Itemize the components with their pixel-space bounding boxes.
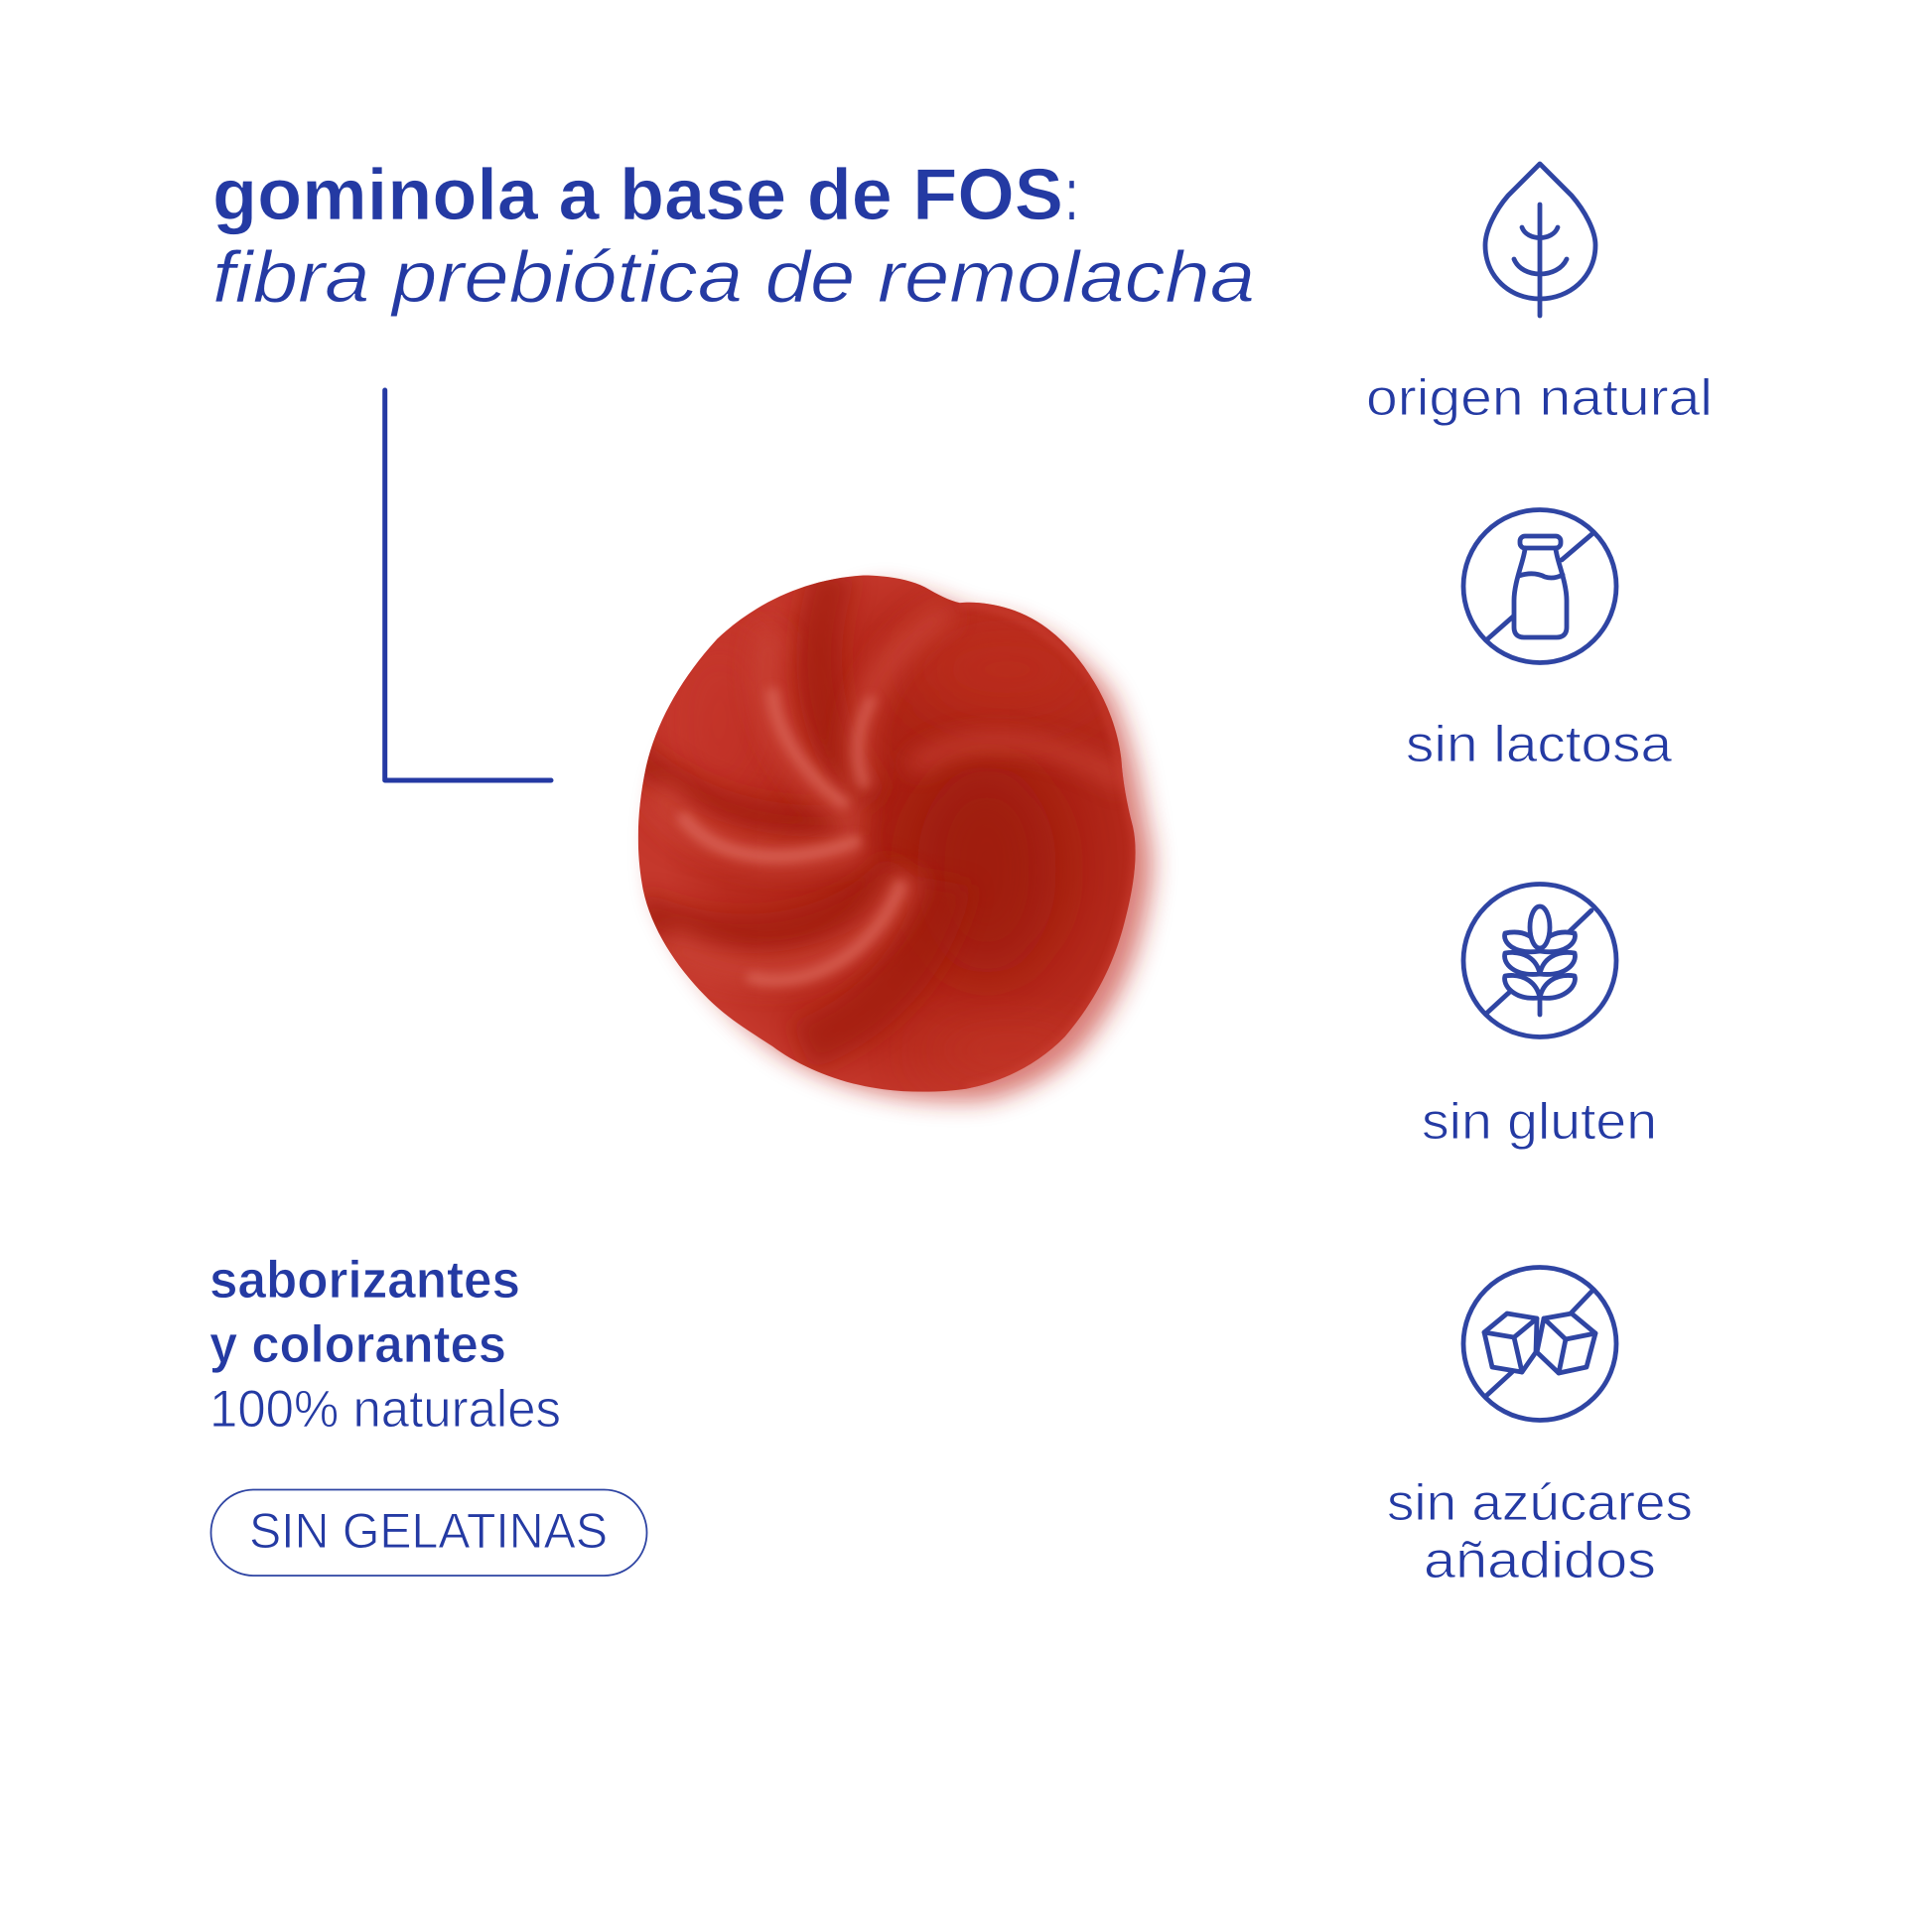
label: origen natural: origen natural — [1366, 369, 1713, 427]
title line 1: gominola a base de FOS — [212, 155, 1063, 235]
gummy drop shadow — [654, 587, 1152, 1101]
specular ridge highlights — [684, 693, 900, 981]
rim light — [965, 602, 1136, 1019]
label: anadidos: añadidos — [1424, 1532, 1656, 1589]
icon: leaf — [1485, 164, 1595, 316]
icon: no sugar cubes — [1463, 1267, 1616, 1420]
dark core — [967, 842, 1057, 975]
title colon: : — [1065, 155, 1078, 235]
text: y colorantes: y colorantes — [209, 1315, 506, 1374]
label: sin lactosa: sin lactosa — [1406, 716, 1672, 773]
dark swirl valleys — [621, 572, 945, 1046]
icon: no gluten wheat — [1463, 884, 1616, 1036]
title — [212, 155, 1255, 318]
broad ridge highlights — [657, 611, 1127, 972]
icon: no lactose bottle — [1463, 510, 1616, 663]
upper right lobe tone — [994, 605, 1093, 680]
gummy body — [637, 576, 1136, 1092]
upper left lobe tone — [645, 613, 760, 778]
callout bracket line — [385, 390, 551, 780]
infographic canvas — [210, 161, 1709, 1579]
badge: sin gelatinas — [210, 1489, 647, 1576]
badge label: SIN GELATINAS — [249, 1503, 608, 1559]
label: sin gluten: sin gluten — [1422, 1093, 1657, 1151]
gummy candy illustration — [617, 556, 1160, 1113]
label: sin azucares: sin azúcares — [1387, 1474, 1693, 1532]
ingredients text block — [209, 1251, 561, 1439]
text: 100% naturales: 100% naturales — [209, 1380, 561, 1439]
lower right edge tone — [921, 1023, 1102, 1078]
title line 2: fibra prebiótica de remolacha — [212, 237, 1255, 318]
text: saborizantes: saborizantes — [209, 1251, 520, 1310]
